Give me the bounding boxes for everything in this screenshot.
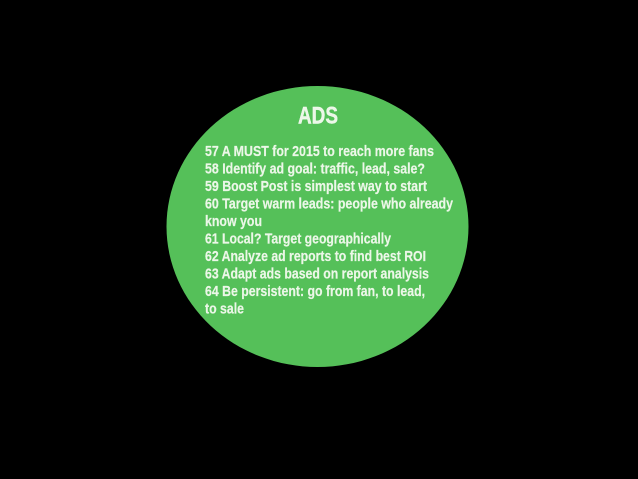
tip 61: 61 Local? Target geographically [205, 230, 392, 247]
tip 62: 62 Analyze ad reports to find best ROI [205, 248, 426, 265]
tip 60: 60 Target warm leads: people who already [205, 195, 454, 212]
tip 57: 57 A MUST for 2015 to reach more fans [205, 143, 434, 160]
tip 64 continued: to sale [205, 300, 244, 317]
tip 60 continued: know you [205, 213, 262, 230]
tip 64: 64 Be persistent: go from fan, to lead, [205, 283, 425, 300]
tip 59: 59 Boost Post is simplest way to start [205, 178, 427, 195]
panel: green circle [166, 86, 468, 367]
tip 63: 63 Adapt ads based on report analysis [205, 265, 429, 282]
tip 58: 58 Identify ad goal: traffic, lead, sale? [205, 160, 425, 177]
heading: ADS: ADS [298, 102, 338, 129]
text block: ad tips list [205, 143, 454, 317]
